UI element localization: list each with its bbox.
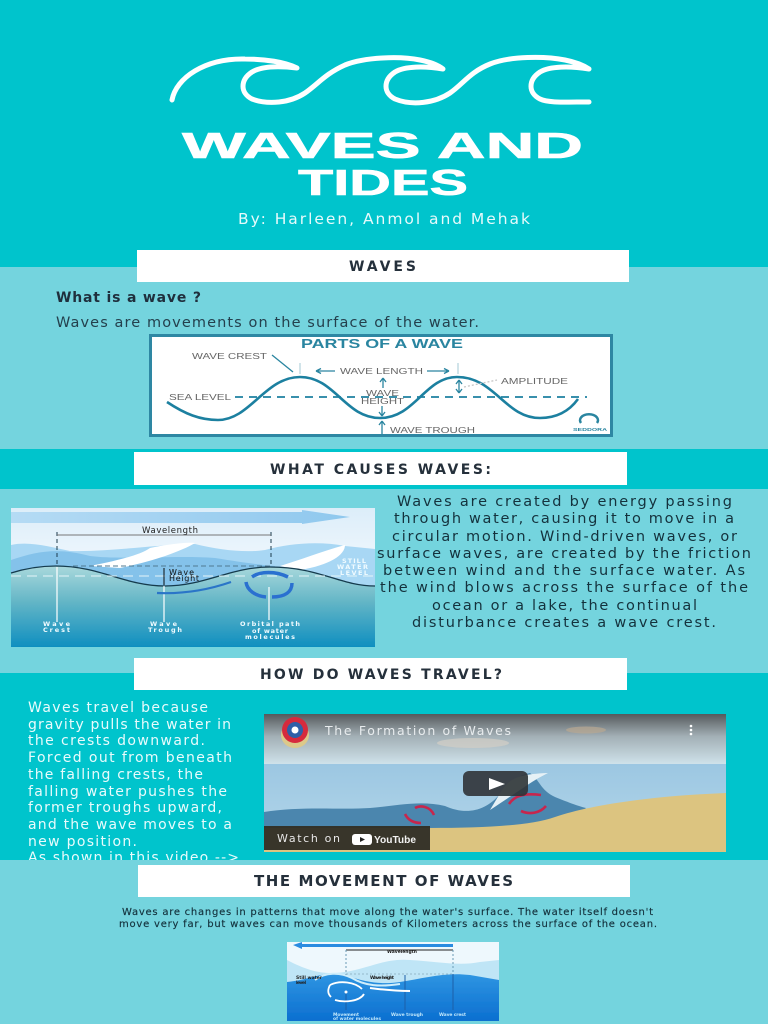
- diagram: wave anatomy: Wave: [43, 620, 71, 628]
- text: how waves travel: Waves travel because: [28, 700, 208, 716]
- diagram: wave anatomy: Wavelength: [142, 526, 198, 536]
- chart: parts of a wave: WAVE CREST: [192, 352, 267, 361]
- text: how waves travel: [28, 700, 239, 866]
- title: [182, 125, 583, 203]
- title: WAVES AND: [182, 125, 583, 166]
- text: what is a wave: What is a wave ?: [56, 290, 201, 306]
- chart: parts of a wave: WAVE: [366, 389, 399, 398]
- text: causes of waves: ocean or a lake, the continual: [432, 598, 697, 614]
- text: movement of waves: [119, 907, 657, 930]
- video embed: YouTube: [374, 834, 416, 846]
- video embed: The Formation of Waves: [324, 723, 511, 738]
- diagram: wave anatomy: molecules: [245, 633, 295, 641]
- diagram: wave anatomy: STILL: [342, 557, 366, 565]
- diagram: wave movement: Still water: [296, 975, 323, 981]
- text: movement of waves: Waves are changes in patterns that move along the water's surface. The water itself doesn't: [122, 907, 653, 918]
- travel section band: [0, 673, 768, 860]
- heading: the movement of waves: [138, 865, 630, 897]
- text: how waves travel: gravity pulls the water in: [28, 717, 231, 733]
- heading: how do waves travel: [134, 658, 627, 690]
- diagram: wave movement: Wave trough: [391, 1012, 423, 1018]
- chart: parts of a wave: [150, 336, 612, 436]
- text: causes of waves: surface waves, are created by the friction: [377, 546, 751, 562]
- heading: the movement of waves: THE MOVEMENT OF WAVES: [254, 872, 513, 890]
- video embed: [264, 714, 726, 852]
- text: how waves travel: new position.: [28, 834, 137, 850]
- diagram: wave movement: Wave crest: [439, 1012, 467, 1018]
- text: how waves travel: the falling crests, the: [28, 767, 203, 783]
- causes heading band: [0, 449, 768, 489]
- authors: By: Harleen, Anmol and Mehak: [238, 210, 530, 228]
- text: causes of waves: disturbance creates a wave crest.: [412, 615, 716, 631]
- diagram: wave anatomy: Crest: [43, 626, 70, 634]
- diagram: wave anatomy: Trough: [148, 626, 182, 634]
- diagram: wave anatomy: Orbital path: [240, 620, 300, 628]
- chart: parts of a wave: AMPLITUDE: [501, 377, 568, 386]
- diagram: wave anatomy: WATER: [337, 563, 368, 571]
- text: how waves travel: As shown in this video -->: [28, 850, 239, 866]
- chart: parts of a wave: PARTS OF A WAVE: [301, 337, 463, 351]
- chart: parts of a wave: HEIGHT: [361, 397, 404, 406]
- text: causes of waves: the wind blows across the surface of the: [380, 580, 748, 596]
- heading: waves: [137, 250, 629, 282]
- text: causes of waves: circular motion. Wind-driven waves, or: [392, 529, 737, 545]
- text: causes of waves: [377, 494, 751, 631]
- title: TIDES: [298, 162, 468, 203]
- heading: what causes waves: WHAT CAUSES WAVES:: [270, 462, 491, 478]
- text: movement of waves: move very far, but waves can move thousands of Kilometers across the surface of the ocean.: [119, 919, 657, 930]
- diagram: wave movement: Wave height: [370, 975, 395, 981]
- icon: wave logo: [172, 57, 589, 103]
- text: causes of waves: between wind and the surface water. As: [383, 563, 745, 579]
- diagram: wave movement: Wavelength: [387, 949, 417, 955]
- diagram: wave anatomy: of water: [252, 627, 289, 635]
- diagram: wave movement: [287, 942, 499, 1022]
- causes section band: [0, 489, 768, 673]
- chart: parts of a wave: WAVE TROUGH: [390, 426, 475, 435]
- chart: parts of a wave: WAVE LENGTH: [340, 367, 423, 376]
- header band: [0, 0, 768, 267]
- text: causes of waves: Waves are created by energy passing: [397, 494, 732, 510]
- diagram: wave movement: Movement: [333, 1012, 360, 1018]
- text: how waves travel: falling water pushes the: [28, 784, 227, 800]
- text: how waves travel: the crests downward.: [28, 733, 205, 749]
- diagram: wave anatomy: [11, 508, 375, 647]
- text: wave definition: Waves are movements on the surface of the water.: [56, 315, 479, 331]
- heading: how do waves travel: HOW DO WAVES TRAVEL?: [260, 667, 502, 683]
- video embed: Watch on: [277, 832, 340, 845]
- heading: waves: WAVES: [349, 259, 416, 275]
- chart: parts of a wave: SEDDORA: [573, 427, 608, 432]
- text: how waves travel: Forced out from beneath: [28, 750, 232, 766]
- diagram: wave anatomy: Height: [169, 574, 199, 583]
- text: how waves travel: former troughs upward,: [28, 800, 222, 816]
- text: causes of waves: through water, causing it to move in a: [394, 511, 734, 527]
- diagram: wave anatomy: LEVEL: [340, 569, 368, 577]
- movement section band: [0, 860, 768, 1024]
- diagram: wave movement: level: [296, 980, 306, 986]
- waves section band: [0, 267, 768, 449]
- diagram: wave anatomy: Wave: [169, 568, 194, 577]
- chart: parts of a wave: SEA LEVEL: [169, 393, 232, 402]
- diagram: wave movement: of water molecules: [333, 1016, 381, 1022]
- text: how waves travel: and the wave moves to a: [28, 817, 232, 833]
- diagram: wave anatomy: Wave: [150, 620, 178, 628]
- heading: what causes waves: [134, 452, 627, 485]
